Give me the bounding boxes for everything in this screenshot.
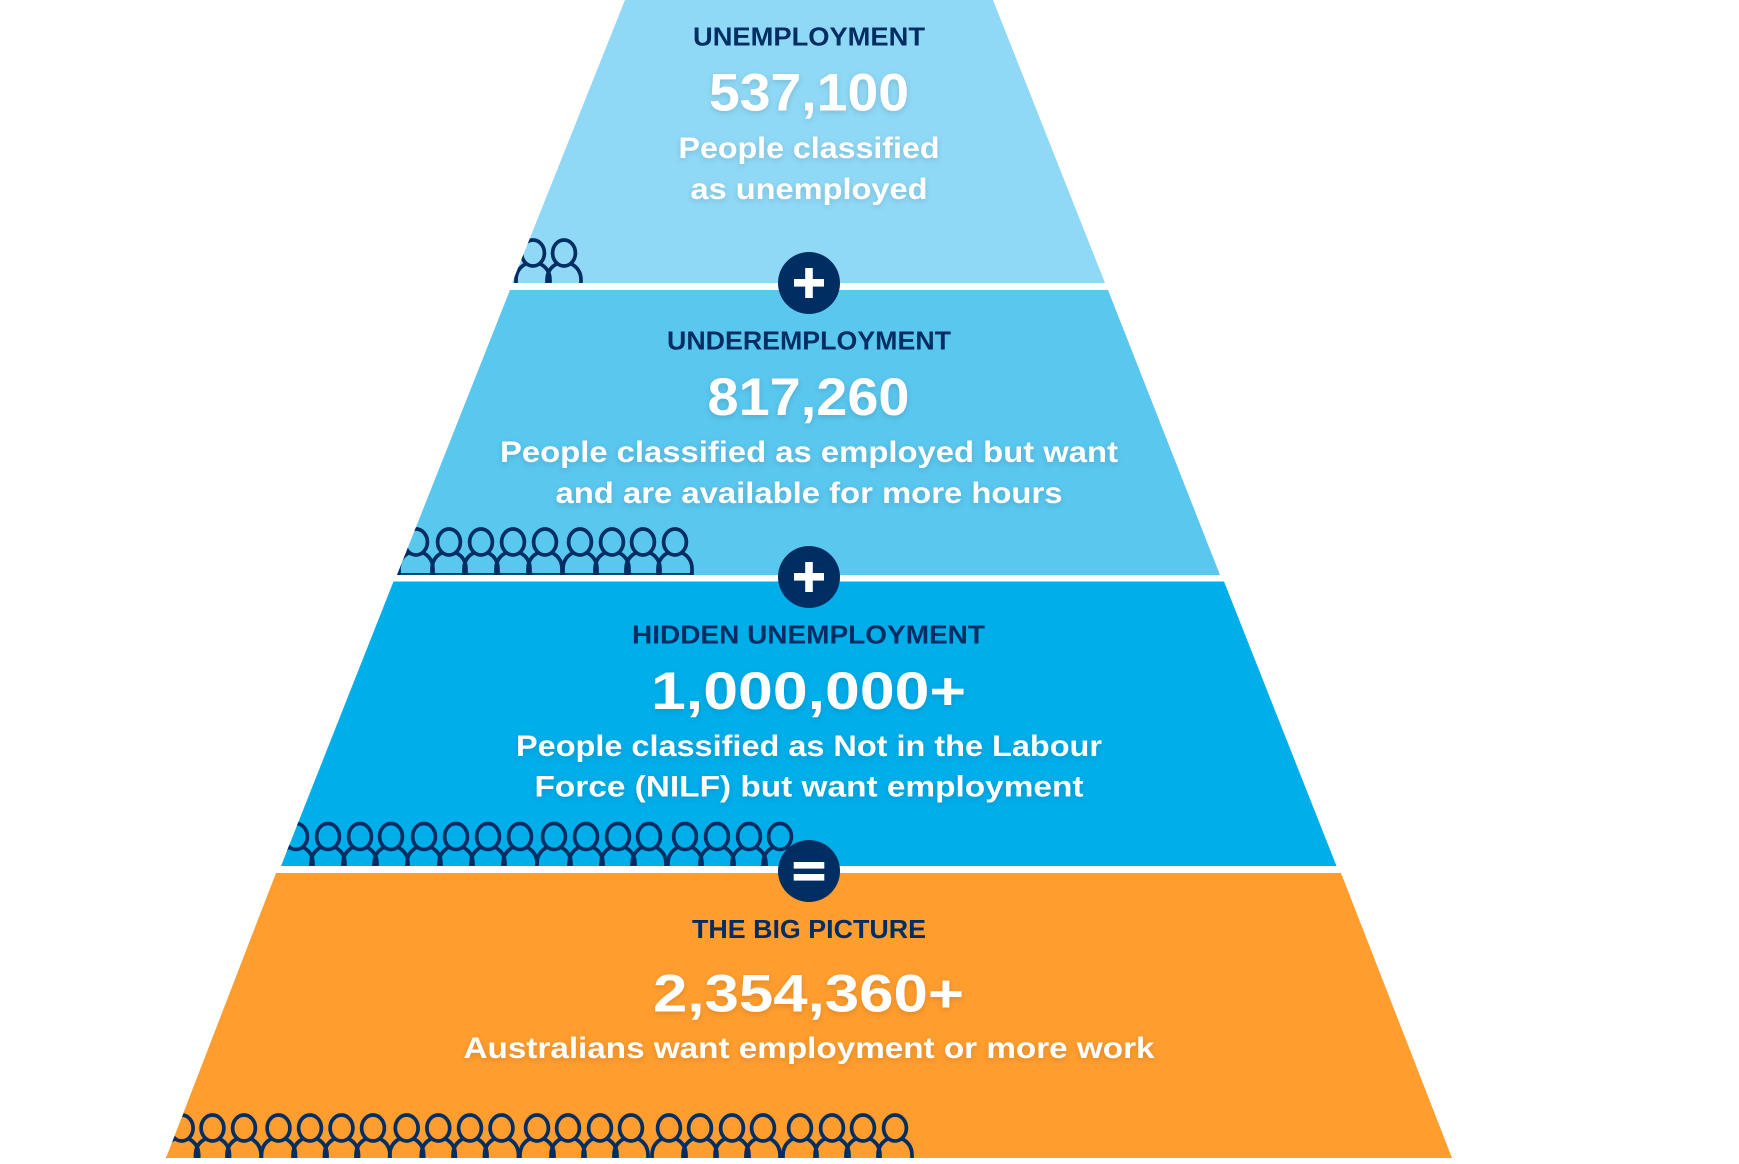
people icons: hidden unemployment xyxy=(279,824,797,870)
heading: unemployment: UNEMPLOYMENT xyxy=(693,22,925,52)
people icons: unemployment xyxy=(516,240,581,287)
panel: underemployment xyxy=(397,290,1220,576)
description: hidden unemployment: Force (NILF) but want employment xyxy=(534,770,1084,804)
pyramid infographic xyxy=(166,0,1452,1158)
panel: unemployment xyxy=(512,0,1105,287)
figure: 2,354,360+: 2,354,360+ xyxy=(653,964,964,1024)
tier shape: underemployment xyxy=(397,290,1220,575)
description: unemployment: People classified xyxy=(678,132,940,165)
panel: the big picture xyxy=(165,873,1452,1162)
description: underemployment xyxy=(500,436,1118,510)
tier shape: unemployment xyxy=(512,0,1105,283)
figure: 537,100: 537,100 xyxy=(709,64,909,123)
tier shape: the big picture xyxy=(166,873,1452,1158)
people icons: the big picture xyxy=(165,1115,912,1162)
figure: 1,000,000+: 1,000,000+ xyxy=(651,662,966,721)
description: the big picture: Australians want employment or more work xyxy=(464,1032,1155,1065)
description: hidden unemployment: People classified as Not in the Labour xyxy=(516,730,1102,763)
description: underemployment: People classified as employed but want xyxy=(500,436,1118,469)
panel: hidden unemployment xyxy=(279,582,1336,870)
description: unemployment xyxy=(678,132,940,206)
icon: plus operator 2 xyxy=(778,546,840,608)
heading: underemployment: UNDEREMPLOYMENT xyxy=(667,326,951,356)
icon: equals operator xyxy=(778,840,840,902)
description: underemployment: and are available for more hours xyxy=(556,477,1062,510)
figure: 817,260: 817,260 xyxy=(708,368,910,427)
heading: the big picture: THE BIG PICTURE xyxy=(692,914,926,944)
heading: hidden unemployment: HIDDEN UNEMPLOYMENT xyxy=(632,620,985,650)
icon: plus operator 1 xyxy=(778,252,840,314)
people icons: underemployment xyxy=(397,529,693,576)
tier shape: hidden unemployment xyxy=(281,582,1336,866)
description: hidden unemployment xyxy=(516,730,1102,804)
description: unemployment: as unemployed xyxy=(690,173,928,206)
